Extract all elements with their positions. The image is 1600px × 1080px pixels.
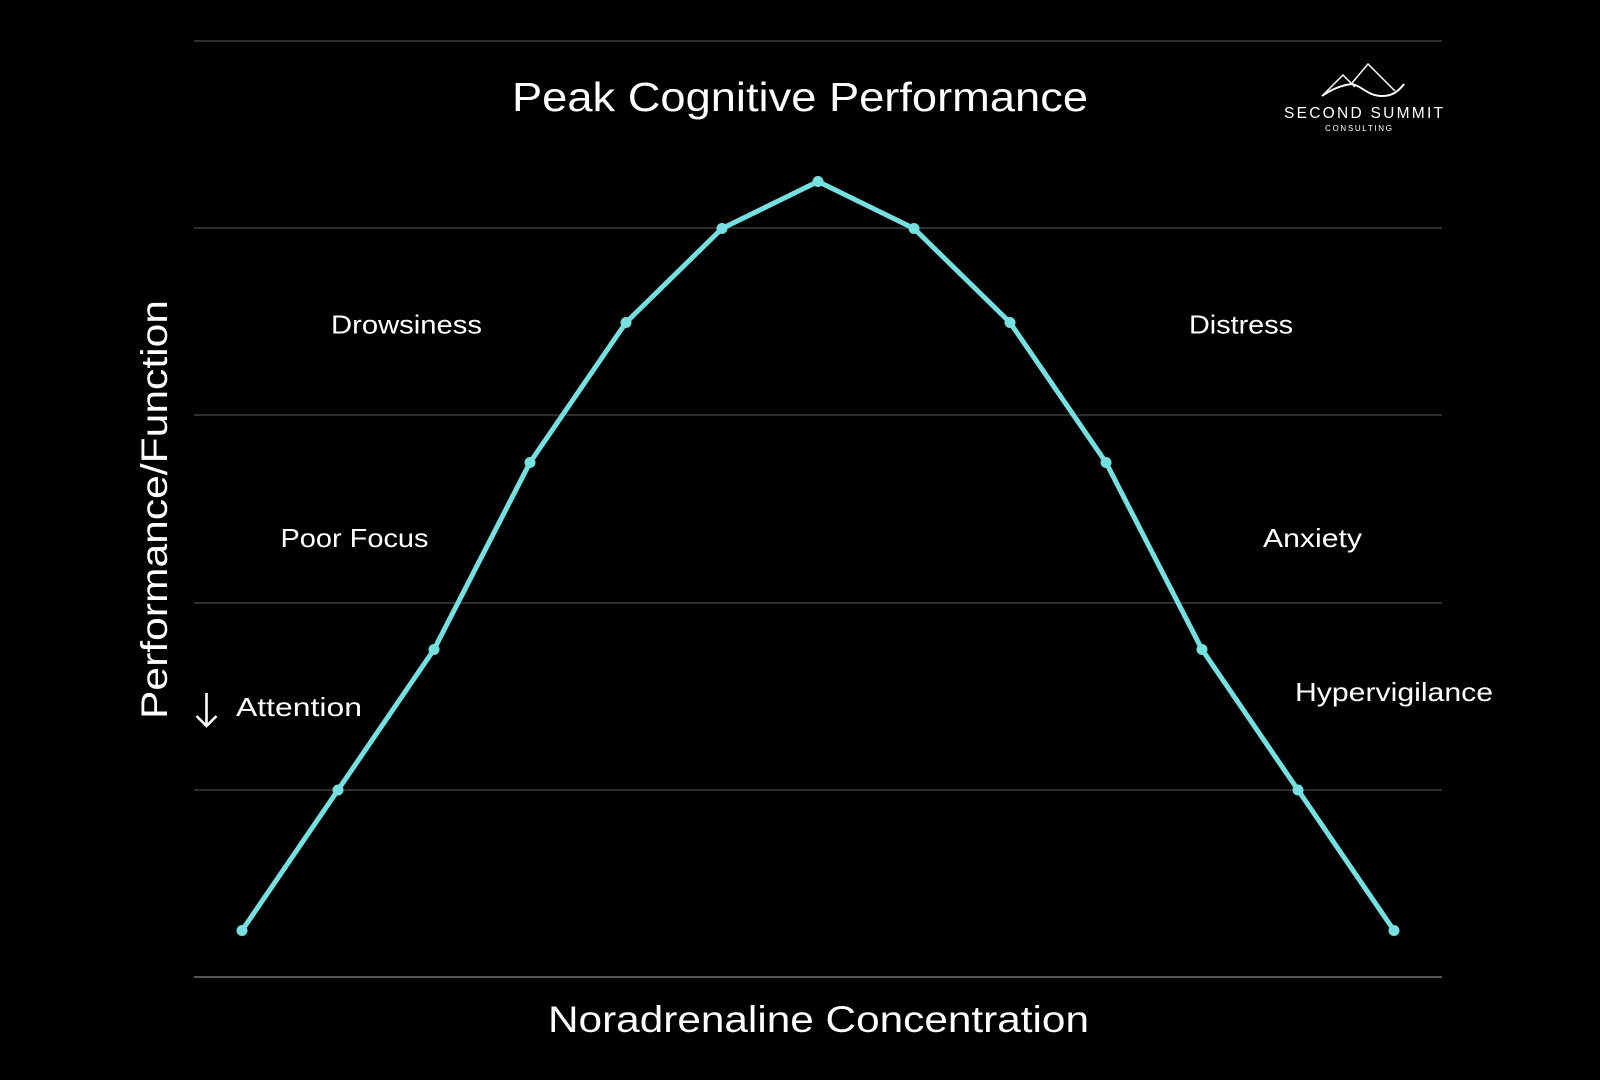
y axis label: Performance/Function (134, 300, 175, 719)
icon: mountains (1322, 64, 1404, 96)
label: Distress: Distress (1189, 310, 1293, 340)
bell curve line chart (236, 176, 1400, 936)
label: Hypervigilance: Hypervigilance (1295, 677, 1493, 707)
x axis label: Noradrenaline Concentration (548, 999, 1089, 1040)
title: Peak Cognitive Performance (512, 74, 1088, 120)
logo subline: CONSULTING (1325, 124, 1392, 133)
icon: down arrow (196, 693, 216, 726)
label: Anxiety: Anxiety (1263, 523, 1362, 553)
logo: Second Summit Consulting (1284, 64, 1444, 133)
label: Attention: Attention (236, 692, 362, 722)
label: Drowsiness: Drowsiness (331, 310, 482, 340)
label: Poor Focus: Poor Focus (280, 523, 428, 553)
logo wordmark: SECOND SUMMIT (1284, 105, 1444, 122)
